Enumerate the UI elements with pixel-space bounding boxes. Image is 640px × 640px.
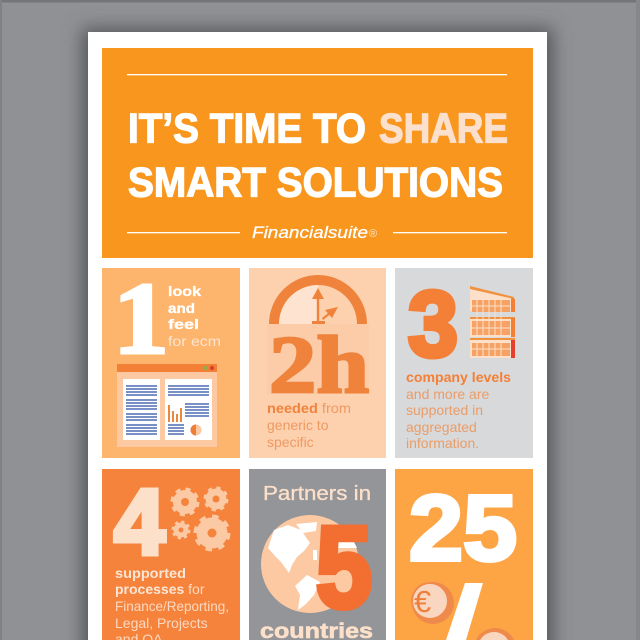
caption: supported in	[406, 402, 483, 418]
number 3: 3	[408, 272, 458, 376]
number 25: 25	[409, 476, 517, 580]
number 4: 4	[114, 470, 165, 574]
caption	[115, 565, 229, 640]
panel: 4 supported processes	[102, 469, 240, 640]
caption: specific	[267, 434, 314, 450]
caption: needed from	[267, 400, 351, 416]
icon: euro coin: €	[414, 584, 431, 619]
icon: gears	[172, 488, 228, 549]
caption: Legal, Projects	[115, 615, 208, 631]
number 2h: 2h	[269, 319, 369, 410]
caption: look	[168, 283, 201, 299]
brand logo	[127, 223, 507, 242]
caption: aggregated	[406, 419, 477, 435]
brand logo: Financialsuite	[252, 223, 368, 242]
caption	[267, 400, 351, 450]
icon: clock arch	[274, 280, 362, 324]
caption: for ecm	[168, 333, 221, 349]
icon: euro coin	[412, 582, 454, 624]
icon: application window	[117, 364, 217, 447]
title	[128, 104, 508, 206]
caption	[406, 369, 511, 451]
caption: Finance/Reporting,	[115, 598, 229, 614]
title: SMART SOLUTIONS	[128, 158, 503, 206]
caption: and more are	[406, 386, 489, 402]
panel: 2h needed	[249, 268, 386, 458]
caption: processes for	[115, 581, 205, 597]
number 1: 1	[113, 262, 169, 376]
title: SHARE	[379, 104, 508, 152]
panel: title banner	[102, 48, 533, 258]
panel: 3 company levels	[395, 268, 533, 458]
caption: and	[168, 300, 195, 316]
number 5: 5	[316, 504, 372, 632]
caption: generic to	[267, 417, 329, 433]
white card	[88, 32, 547, 640]
panel: partners in 5 countries	[249, 469, 386, 640]
caption: information.	[406, 435, 479, 451]
icon: stacked buildings	[470, 286, 515, 358]
heading: Partners in	[263, 483, 371, 505]
caption: company levels	[406, 369, 511, 385]
caption: supported	[115, 565, 186, 581]
panel: 25 percent	[395, 469, 533, 640]
icon: globe	[261, 515, 359, 613]
brand logo: ®	[369, 228, 377, 240]
panel: 1 look and feel	[102, 262, 240, 458]
title: IT’S TIME TO	[128, 104, 366, 152]
caption: feel	[168, 316, 199, 332]
percent slash	[446, 583, 483, 640]
caption	[168, 283, 221, 349]
icon: second euro coin	[474, 628, 516, 640]
